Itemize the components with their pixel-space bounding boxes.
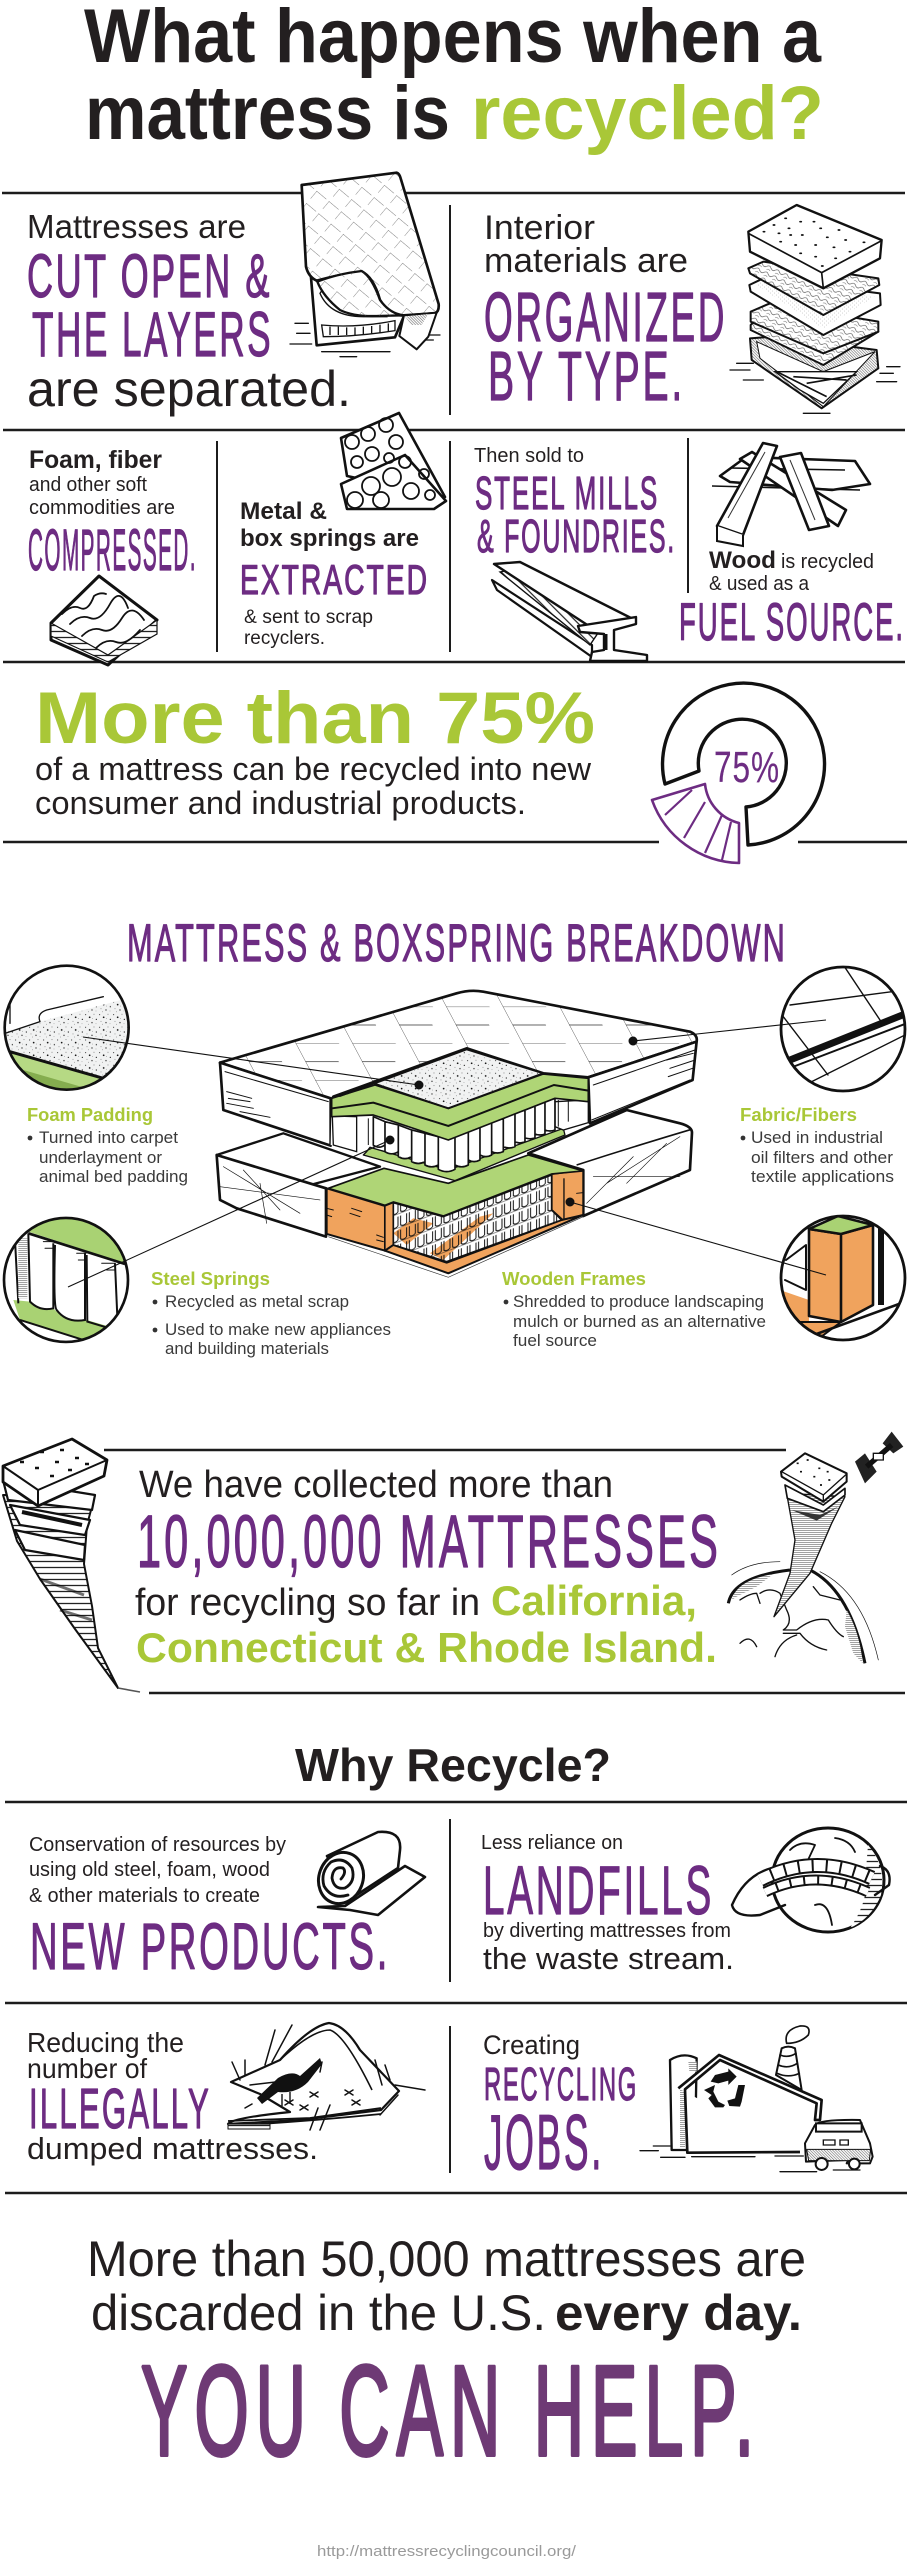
text: creating: Creating <box>483 2030 580 2060</box>
panel: organized: materials are <box>484 242 688 280</box>
panel: compressed <box>28 446 197 665</box>
text: foam fiber: Foam, fiber <box>29 446 162 474</box>
section rules and dividers <box>2 193 907 2193</box>
callout: wooden frames: mulch or burned as an alternative <box>513 1312 766 1331</box>
panel: compressed: and other soft <box>29 474 147 496</box>
callout: steel springs: Recycled as metal scrap <box>165 1292 349 1311</box>
callout: wooden frames: Shredded to produce landscaping <box>513 1292 764 1311</box>
text: discarded every day: discarded in the U.S. <box>91 2285 546 2341</box>
icon: fabric circle <box>781 960 907 1091</box>
text: steel springs: Steel Springs <box>151 1268 270 1289</box>
leader lines <box>68 1020 826 1287</box>
text: new products: NEW PRODUCTS. <box>30 1909 390 1983</box>
panel: 10 million collected: Connecticut & Rhode Island. <box>136 1624 717 1671</box>
callout: wooden frames: fuel source <box>513 1331 597 1350</box>
icon: recycling factory and truck <box>640 2026 873 2172</box>
panel: recycling jobs: JOBS. <box>484 2098 604 2186</box>
text: are separated: are separated. <box>27 361 351 417</box>
callout: fabric fibers: textile applications <box>751 1167 894 1186</box>
panel: illegally dumped: number of <box>27 2053 147 2084</box>
panel: compressed: commodities are <box>29 497 175 519</box>
panel: new products: & other materials to create <box>29 1884 260 1907</box>
callout: foam padding <box>0 966 188 1186</box>
heading: why recycle: Why Recycle? <box>295 1739 611 1791</box>
panel: fuel source <box>679 443 905 652</box>
callout: fabric fibers <box>740 960 907 1186</box>
text: foam padding: Foam Padding <box>27 1104 153 1125</box>
text: more than 50,000: More than 50,000 mattresses are <box>87 2231 806 2287</box>
panel: extracted: recyclers. <box>244 627 325 649</box>
panel: more than 75 percent: consumer and industrial products. <box>35 785 526 821</box>
panel: landfills: the waste stream. <box>483 1941 734 1976</box>
panel: 10 million collected <box>3 1432 903 1692</box>
icon: wood planks <box>712 443 870 546</box>
diagram: mattress and boxspring cutaway <box>217 991 697 1277</box>
icon: opened mattress <box>290 173 440 357</box>
panel: 10 million collected: California, <box>491 1577 697 1624</box>
box spring <box>217 1110 692 1277</box>
text: we have collected: We have collected more than <box>139 1464 613 1506</box>
panel: fuel source: & used as a <box>709 573 810 595</box>
text: more than 75%: More than 75% <box>35 678 595 759</box>
callout: foam padding: underlayment or <box>39 1148 162 1167</box>
panel: new products: using old steel, foam, wood <box>29 1858 270 1881</box>
text: by diverting: by diverting mattresses from <box>483 1919 731 1942</box>
text: for recycling: for recycling so far in <box>135 1582 480 1624</box>
panel: extracted <box>240 413 446 649</box>
panel: call to action: every day. <box>555 2285 802 2341</box>
panel: new products <box>29 1832 425 1983</box>
panel: recycling jobs <box>483 2026 873 2186</box>
callout: fabric fibers: Used in industrial <box>751 1128 883 1147</box>
top mattress <box>220 991 697 1181</box>
icon: wood circle <box>780 1216 907 1345</box>
icon: dumped mattress with bird <box>228 2023 425 2130</box>
text: fabric fibers: Fabric/Fibers <box>740 1104 857 1125</box>
panel: steel mills: & FOUNDRIES. <box>477 510 676 562</box>
title <box>84 0 824 156</box>
panel: cut open <box>27 173 440 417</box>
text: reducing the number of: Reducing the <box>27 2027 184 2058</box>
text: COMPRESSED. <box>28 518 197 583</box>
callout: foam padding: animal bed padding <box>39 1167 188 1186</box>
callout: steel springs: Used to make new appliances <box>165 1320 391 1339</box>
panel: more than 75 percent <box>35 678 825 863</box>
panel: extracted: box springs are <box>240 525 419 552</box>
text: extracted: EXTRACTED <box>240 556 429 603</box>
panel: landfills <box>481 1828 890 1976</box>
icon: spring coils <box>341 413 446 509</box>
chart: donut 75 percent: 75% <box>714 743 780 792</box>
title: mattress is <box>85 71 450 156</box>
callout: wooden frames <box>502 1216 907 1350</box>
text: then sold to: Then sold to <box>474 445 584 467</box>
text: steel mills and foundries: STEEL MILLS <box>475 467 659 519</box>
text: landfills: LANDFILLS <box>483 1852 714 1929</box>
text: description: of a mattress can be recycled into new <box>35 751 592 787</box>
text: wooden frames: Wooden Frames <box>502 1268 646 1289</box>
icon: springs circle <box>4 1217 130 1342</box>
text: sent to scrap: & sent to scrap <box>244 606 373 628</box>
text: wood is recycled: Wood <box>709 547 776 574</box>
icon: steel I-beam <box>492 562 647 661</box>
icon: earth holding mattresses <box>732 1828 890 1932</box>
panel: organized: BY TYPE. <box>488 337 685 415</box>
panel: fuel source: is recycled <box>781 551 874 573</box>
panel: organized <box>484 205 900 415</box>
text: illegally: ILLEGALLY <box>29 2077 211 2141</box>
chart: donut 75 percent <box>652 683 825 863</box>
text: metal and box springs: Metal & <box>240 498 327 525</box>
callout: steel springs: and building materials <box>165 1339 329 1358</box>
text: the layers: THE LAYERS <box>32 300 273 370</box>
icon: foam circle <box>3 964 130 1091</box>
source url: http://mattressrecyclingcouncil.org/ <box>317 2543 577 2560</box>
icon: foam roll <box>311 1832 425 1915</box>
text: cut open: CUT OPEN & <box>27 242 272 310</box>
text: dumped mattresses: dumped mattresses. <box>27 2131 318 2166</box>
text: less reliance: Less reliance on <box>481 1831 623 1854</box>
callout: foam padding: Turned into carpet <box>39 1128 178 1147</box>
panel: call to action <box>87 2231 806 2483</box>
text: recycling: RECYCLING <box>484 2058 638 2110</box>
icon: left mattress tornado <box>3 1439 140 1692</box>
callout: steel springs <box>4 1217 391 1358</box>
callout: fabric fibers: oil filters and other <box>751 1148 893 1167</box>
title: recycled? <box>471 71 824 156</box>
panel: steel mills <box>474 445 676 661</box>
panel: illegally dumped <box>27 2023 425 2166</box>
text: conservation: Conservation of resources by <box>29 1833 287 1856</box>
text: mattresses are: Mattresses are <box>27 208 246 245</box>
icon: exploded mattress layers <box>730 205 900 413</box>
icon: earth with tornado and satellite <box>728 1432 903 1663</box>
text: interior materials: Interior <box>484 209 595 247</box>
icon: foam block <box>51 576 157 665</box>
